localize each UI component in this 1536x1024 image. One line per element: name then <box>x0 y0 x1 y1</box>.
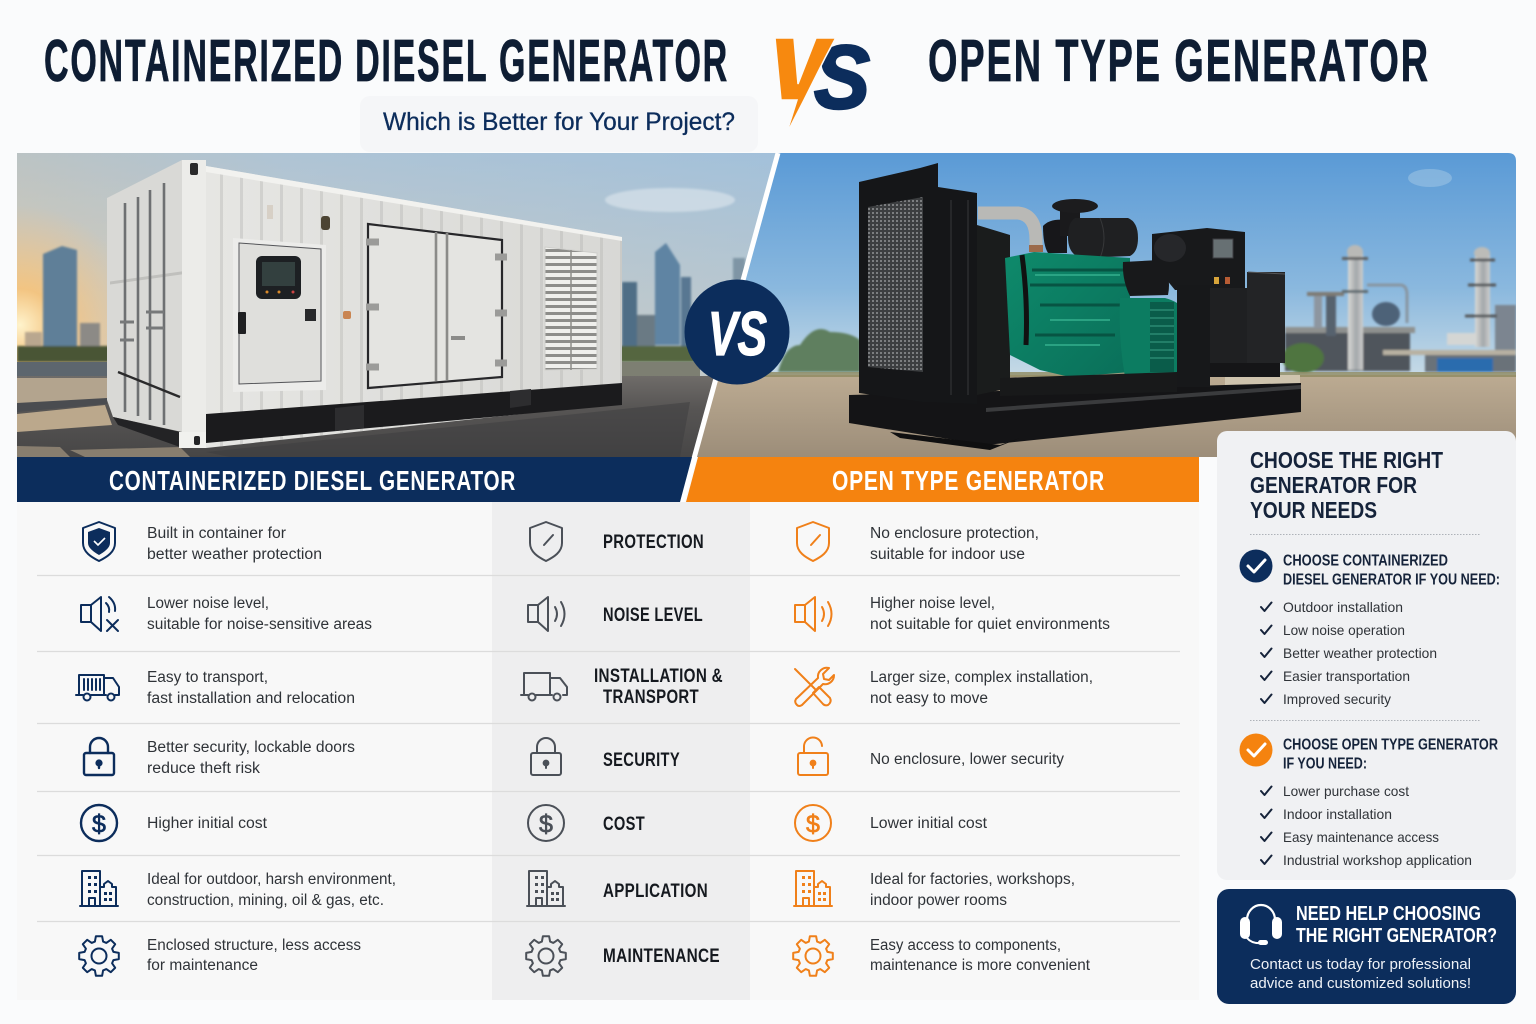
text: containerized cost: Higher initial cost <box>147 815 268 832</box>
icon: dollar coin: $ <box>92 810 106 838</box>
photo: containerized generator on city rooftop <box>17 153 787 457</box>
text: open application: Ideal for factories, workshops, <box>870 871 1075 888</box>
text: open cost: Lower initial cost <box>870 815 988 832</box>
photo: open type generator at refinery <box>690 153 1520 457</box>
call to action: NEED HELP CHOOSING <box>1296 903 1481 925</box>
text: containerized security <box>147 739 355 777</box>
containerized checklist <box>1240 550 1500 707</box>
row: cost <box>81 805 988 841</box>
text: containerized application: construction, mining, oil & gas, etc. <box>147 892 384 909</box>
exhaust pipe <box>978 213 1036 248</box>
icon: speaker orange <box>795 597 832 631</box>
panel: choose the right generator <box>1217 431 1516 880</box>
text: open noise <box>870 595 1110 633</box>
containerized checklist: Outdoor installation <box>1283 599 1403 615</box>
row: maintenance <box>79 936 1091 976</box>
containerized checklist: Improved security <box>1283 691 1391 707</box>
label: installation and transport: TRANSPORT <box>603 687 699 708</box>
label: maintenance: MAINTENANCE <box>603 946 720 967</box>
text: containerized protection <box>147 525 322 563</box>
text: open maintenance <box>870 937 1091 974</box>
open generator <box>849 163 1301 450</box>
icon: buildings <box>80 871 118 906</box>
panel heading: GENERATOR FOR <box>1250 472 1417 498</box>
text: open protection <box>870 525 1039 563</box>
text: containerized noise <box>147 595 372 633</box>
text: open security: No enclosure, lower security <box>870 751 1064 768</box>
panel heading: CHOOSE THE RIGHT <box>1250 447 1444 473</box>
containerized checklist: Better weather protection <box>1283 645 1437 661</box>
containerized checklist: Low noise operation <box>1283 622 1405 638</box>
text: open application <box>870 871 1075 909</box>
icon: muted speaker <box>81 597 118 631</box>
label: application: APPLICATION <box>603 881 708 902</box>
icon: container truck <box>76 675 119 700</box>
containerized checklist: CHOOSE CONTAINERIZED <box>1283 552 1448 570</box>
label: protection: PROTECTION <box>603 532 704 553</box>
open type checklist: Lower purchase cost <box>1283 783 1409 799</box>
text: open installation: not easy to move <box>870 690 988 707</box>
icon: buildings gray <box>527 871 565 906</box>
open type checklist: Indoor installation <box>1283 806 1392 822</box>
text: containerized maintenance <box>147 937 361 974</box>
row: noise level <box>81 595 1110 633</box>
text: open installation <box>870 669 1093 707</box>
panel heading <box>1250 447 1444 523</box>
control box <box>1152 228 1245 290</box>
icon: wrench and screwdriver <box>795 668 834 706</box>
air filter <box>1043 220 1067 253</box>
icon: dollar coin orange: $ <box>806 810 820 838</box>
text: open application: indoor power rooms <box>870 892 1007 909</box>
panel heading: YOUR NEEDS <box>1250 497 1377 523</box>
text: containerized security: reduce theft risk <box>147 760 260 777</box>
VS badge <box>684 280 790 384</box>
banner: open type <box>686 457 1199 502</box>
icon: gear gray <box>526 936 566 976</box>
call to action <box>1217 889 1516 1004</box>
containerized checklist: Easier transportation <box>1283 668 1410 684</box>
icon: shield <box>530 522 562 561</box>
icon: speaker <box>528 597 564 631</box>
row: protection <box>83 522 1039 563</box>
city buildings <box>25 243 745 352</box>
text: containerized application <box>147 871 396 909</box>
row: security <box>84 737 1064 777</box>
text: open protection: No enclosure protection, <box>870 525 1039 542</box>
banner: containerized: CONTAINERIZED DIESEL GENERATOR <box>109 465 516 496</box>
text: open noise: not suitable for quiet environments <box>870 616 1110 633</box>
text: containerized maintenance: Enclosed structure, less access <box>147 937 361 954</box>
divider: white diagonal <box>682 153 778 502</box>
text: containerized noise: Lower noise level, <box>147 595 269 612</box>
VS badge: VS <box>708 300 767 369</box>
banner: open type: OPEN TYPE GENERATOR <box>832 465 1105 496</box>
label: installation and transport <box>594 666 723 708</box>
text: containerized noise: suitable for noise-sensitive areas <box>147 616 372 633</box>
icon: lock <box>84 738 114 775</box>
icon: dollar coin gray: $ <box>539 810 553 838</box>
open type checklist: Industrial workshop application <box>1283 852 1472 868</box>
rooftop paving <box>17 378 107 403</box>
alternator <box>1120 298 1177 374</box>
text: containerized application: Ideal for outdoor, harsh environment, <box>147 871 396 888</box>
open type checklist <box>1240 734 1498 868</box>
refinery <box>1282 245 1516 373</box>
text: containerized transport <box>147 669 355 707</box>
icon: dollar coin orange <box>795 805 831 841</box>
subtitle: Which is Better for Your Project? <box>383 108 735 136</box>
label: installation and transport: INSTALLATION & <box>594 666 723 687</box>
icon: buildings orange <box>794 871 832 906</box>
icon: gear orange <box>793 936 833 976</box>
text: containerized security: Better security, lockable doors <box>147 739 355 756</box>
control door <box>233 238 326 392</box>
intercooler <box>1123 260 1169 296</box>
green engine <box>1005 252 1130 377</box>
icon: dollar coin gray <box>528 805 564 841</box>
open type checklist: IF YOU NEED: <box>1283 756 1367 772</box>
tree line <box>778 329 860 372</box>
icon: gear <box>79 936 119 976</box>
text: containerized transport: fast installation and relocation <box>147 690 355 707</box>
row: installation and transport <box>76 666 1093 708</box>
icon: shield orange <box>797 522 829 561</box>
banner: containerized <box>17 457 692 502</box>
text: open noise: Higher noise level, <box>870 595 995 612</box>
comparison table <box>17 502 1199 1000</box>
call to action: Contact us today for professional <box>1250 956 1471 973</box>
text: containerized maintenance: for maintenance <box>147 957 258 974</box>
icon: headset <box>1240 905 1282 945</box>
container <box>107 160 622 448</box>
icon: dollar coin <box>81 805 117 841</box>
row: application <box>80 871 1075 909</box>
title: containerized diesel generator: CONTAINERIZED DIESEL GENERATOR <box>44 28 729 94</box>
text: containerized transport: Easy to transport, <box>147 669 268 686</box>
icon: shield check <box>83 522 115 561</box>
open type checklist: Easy maintenance access <box>1283 829 1439 845</box>
icon: open lock <box>798 737 828 775</box>
text: open maintenance: maintenance is more convenient <box>870 957 1091 974</box>
VS logo with lightning bolt: S <box>814 28 870 128</box>
louver <box>545 247 597 370</box>
icon: truck <box>521 673 567 700</box>
text: open maintenance: Easy access to components, <box>870 937 1061 954</box>
text: containerized protection: better weather protection <box>147 546 322 563</box>
text: open protection: suitable for indoor use <box>870 546 1025 563</box>
label: noise level: NOISE LEVEL <box>603 605 703 626</box>
call to action: advice and customized solutions! <box>1250 975 1471 992</box>
text: containerized protection: Built in container for <box>147 525 286 542</box>
subtitle <box>360 96 758 152</box>
label: security: SECURITY <box>603 750 680 771</box>
icon: lock gray <box>531 738 561 775</box>
text: open installation: Larger size, complex installation, <box>870 669 1093 686</box>
double door <box>368 224 502 388</box>
label: cost: COST <box>603 814 645 835</box>
VS logo with lightning bolt <box>775 13 870 135</box>
